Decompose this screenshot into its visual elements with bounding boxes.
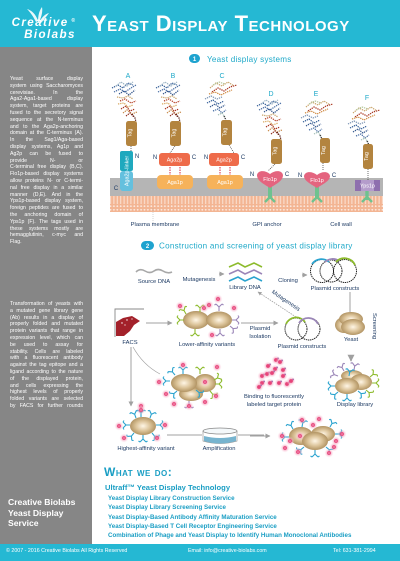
services panel xyxy=(104,465,352,539)
sidebar intro text: nal free display in a similar xyxy=(10,185,83,191)
display system A: C xyxy=(114,186,119,192)
plasmid constructs lower: Plasmid constructs xyxy=(278,344,326,350)
display system A: Tag xyxy=(128,129,134,137)
arrow to right cluster xyxy=(250,435,270,437)
arrow facs down xyxy=(130,347,132,406)
sidebar service title: Service xyxy=(8,518,39,528)
membrane band xyxy=(110,178,383,212)
highest-affinity cell xyxy=(114,401,175,452)
sidebar intro text: Ag2p can be fused to xyxy=(10,151,83,157)
sidebar service title xyxy=(8,497,75,528)
plasmid constructs top xyxy=(310,258,359,292)
display system E xyxy=(298,91,337,202)
sidebar library text: against the tag epitope and a xyxy=(10,362,83,368)
display system B: B xyxy=(171,73,176,80)
cloning arrow: Cloning xyxy=(278,278,298,284)
connector lines around amplification xyxy=(167,434,264,436)
plasmid isolation arrow xyxy=(241,323,278,340)
sidebar intro text xyxy=(10,76,83,245)
sidebar library text: expression level, which can xyxy=(10,335,83,341)
sidebar intro text: hemagglutinin, c-myc and xyxy=(10,232,83,238)
sidebar library text: protein variants that range in xyxy=(10,328,83,334)
display system B: Aga1p xyxy=(167,180,183,186)
source dna xyxy=(136,270,172,285)
arrow to yeast xyxy=(349,292,351,312)
display library cells: Display library xyxy=(337,402,373,408)
sidebar service title: Creative Biolabs xyxy=(8,497,75,507)
lower affinity variants: Lower-affinity variants xyxy=(179,342,235,348)
email: Email: info@creative-biolabs.com xyxy=(188,548,267,554)
service list: Combination of Phage and Yeast Display to Identify Human Monoclonal Antibodies xyxy=(108,532,351,539)
mutagenesis diagonal arrow xyxy=(258,289,301,317)
sidebar xyxy=(0,47,92,544)
display system B: C xyxy=(192,155,197,161)
sidebar library text: with a fluorescent antibody xyxy=(10,355,83,361)
display system B: Aga2p xyxy=(167,158,182,164)
enriched cell cluster xyxy=(154,360,222,411)
sidebar intro text: manner (D,E). And in the xyxy=(10,192,83,198)
display system C xyxy=(204,73,246,189)
section 2 heading: 2 xyxy=(146,244,150,250)
logo leaf icon xyxy=(27,7,49,24)
sidebar intro text: and to the Aga2p-anchoring xyxy=(10,124,83,130)
sidebar library text: ligand according to the nature xyxy=(10,369,83,375)
binding fluorescent target protein: labeled target protein xyxy=(247,402,301,408)
sidebar library text: by FACS for further rounds xyxy=(10,403,83,409)
facs plot: FACS xyxy=(122,340,138,346)
display system D: Tag xyxy=(272,147,278,155)
amplification dish: Amplification xyxy=(203,446,235,452)
source dna: Source DNA xyxy=(138,279,170,285)
arrow facs to cells xyxy=(146,322,172,324)
what we do heading: What we do: xyxy=(104,465,172,479)
sidebar intro text: fused to the secretory signal xyxy=(10,110,83,116)
service list xyxy=(108,495,352,539)
sidebar intro text: Flo1p-based display systems xyxy=(10,171,83,177)
display system B: Tag xyxy=(172,129,178,137)
display system E: Tag xyxy=(321,146,327,155)
library dna: Library DNA xyxy=(229,285,261,291)
binding fluorescent target protein: Binding to fluorescently xyxy=(244,394,304,400)
cloning arrow xyxy=(278,275,307,284)
sidebar library text xyxy=(10,301,83,409)
lower affinity variants xyxy=(175,294,239,348)
display library cells xyxy=(328,362,379,408)
display system E: Flo1p xyxy=(310,178,324,184)
sidebar intro text: Yeast surface display xyxy=(10,76,83,82)
sidebar library text: a mutated gene library gene xyxy=(10,308,83,314)
membrane labels: Plasma membrane xyxy=(131,222,179,228)
service list: Yeast Display-Based T Cell Receptor Engineering Service xyxy=(108,523,277,530)
display system F: F xyxy=(365,95,369,102)
arrow to display library xyxy=(350,356,352,361)
sidebar intro text: the anchoring domain of xyxy=(10,212,83,218)
yeast cells xyxy=(335,312,365,343)
section 1 heading: Yeast display systems xyxy=(207,55,292,64)
sidebar library text: stability. Cells are labeled xyxy=(10,349,83,355)
display system D: N xyxy=(250,172,254,178)
logo wordmark: Biolabs xyxy=(24,28,76,40)
sidebar intro text: Aga2-Aga1-based display xyxy=(10,96,83,102)
title: Yeast Display Technology xyxy=(92,11,350,36)
service list: Yeast Display Library Construction Service xyxy=(108,495,235,502)
highest-affinity cell: Highest-affinity variant xyxy=(117,446,175,452)
facs plot xyxy=(115,309,144,346)
sidebar library text: Transformation of yeasts with xyxy=(10,301,83,307)
service list: Yeast Display-Based Antibody Affinity Maturation Service xyxy=(108,514,277,521)
sidebar intro text: allow proteins N- or C-termi- xyxy=(10,178,83,184)
display system D: D xyxy=(268,91,274,98)
sidebar library text: folded variants are selected xyxy=(10,396,83,402)
sidebar intro text: foreign peptides are fused to xyxy=(10,205,83,211)
library dna xyxy=(229,263,262,291)
logo wordmark: Creative ® xyxy=(12,16,76,29)
display system C: C xyxy=(241,155,246,161)
section 2 heading: Construction and screening of yeast display library xyxy=(159,242,353,250)
plasmid constructs top: Plasmid constructs xyxy=(311,286,359,292)
mutagenesis diagonal arrow: Mutagenesis xyxy=(270,289,301,313)
display system B xyxy=(153,73,197,189)
binding fluorescent target protein xyxy=(244,355,304,408)
yeast cells: Yeast xyxy=(344,337,359,343)
display system C: Tag xyxy=(222,128,228,136)
display system C: Aga2p xyxy=(216,158,232,164)
sidebar intro text: system, target proteins are xyxy=(10,103,83,109)
sidebar library text: be used to assay for xyxy=(10,342,83,348)
mutagenesis arrow: Mutagenesis xyxy=(183,277,216,283)
plasmid constructs lower xyxy=(278,317,326,350)
sidebar library text: properly folded and mutated xyxy=(10,321,83,327)
service list: Yeast Display Library Screening Service xyxy=(108,504,226,511)
display system F: Yps1p xyxy=(360,184,375,190)
curve to enriched cells xyxy=(133,347,160,374)
display system E: N xyxy=(298,173,302,179)
display system A: A xyxy=(126,73,131,80)
sidebar intro text: Flag. xyxy=(10,239,22,245)
sidebar library text: highest levels of properly xyxy=(10,389,83,395)
screening label: Screening xyxy=(371,313,377,339)
sidebar intro text: Yps1p (F). The tags used in xyxy=(10,219,83,225)
sidebar library text: and cells expressing the xyxy=(10,383,83,389)
display system A: N xyxy=(135,154,139,160)
amplification dish xyxy=(203,428,237,452)
display system F xyxy=(348,95,380,202)
plasmid isolation arrow: Isolation xyxy=(249,334,271,340)
sidebar intro text: provide N- or xyxy=(10,158,83,164)
mutagenesis arrow xyxy=(183,274,224,283)
sidebar service title: Yeast Display xyxy=(8,508,63,518)
sidebar library text: (Ab) results in a display of xyxy=(10,315,83,321)
display system A xyxy=(112,73,139,192)
display system C: Aga1p xyxy=(217,180,233,186)
membrane labels xyxy=(131,208,352,228)
footer xyxy=(0,544,400,561)
display system D xyxy=(250,91,290,202)
phone: Tel: 631-381-2994 xyxy=(333,548,376,554)
display system B: N xyxy=(153,155,157,161)
logo wordmark xyxy=(12,16,76,40)
display system E: E xyxy=(314,91,319,98)
display system E: C xyxy=(332,173,337,179)
display system C: N xyxy=(204,155,208,161)
sidebar intro text: system using Saccharomyces xyxy=(10,83,83,89)
ultraff heading: Ultraff™ Yeast Display Technology xyxy=(105,483,230,492)
display system D: Flo1p xyxy=(263,177,277,183)
plasmid isolation arrow: Plasmid xyxy=(250,326,270,332)
display system C: C xyxy=(219,73,225,80)
display system A: Aga2p-linker xyxy=(124,156,130,186)
sidebar intro text: sequence at the N-terminus xyxy=(10,117,83,123)
high binding cell cluster xyxy=(277,414,347,458)
sidebar intro text: these systems mostly are xyxy=(10,226,83,232)
sidebar library text: of the displayed protein, xyxy=(10,376,83,382)
membrane labels: Cell wall xyxy=(330,222,352,228)
header banner xyxy=(0,0,400,47)
sidebar intro text: In the Sag1/Aga-based xyxy=(10,137,83,143)
membrane labels: GPI anchor xyxy=(252,222,282,228)
sidebar intro text: C-terminal free display (B,C). xyxy=(10,164,83,170)
display system D: C xyxy=(285,172,290,178)
sidebar intro text: cerevisiae. In the xyxy=(10,90,83,96)
section 1 heading: 1 xyxy=(193,57,197,63)
sidebar intro text: domain at the C-terminus (A). xyxy=(10,130,83,136)
sidebar intro text: Yps1p-based display system, xyxy=(10,198,83,204)
logo xyxy=(12,16,76,40)
sidebar intro text: display systems, Ag1p and xyxy=(10,144,83,150)
display system F: Tag xyxy=(364,152,370,161)
copyright: © 2007 - 2016 Creative Biolabs All Rights Reserved xyxy=(6,548,127,554)
